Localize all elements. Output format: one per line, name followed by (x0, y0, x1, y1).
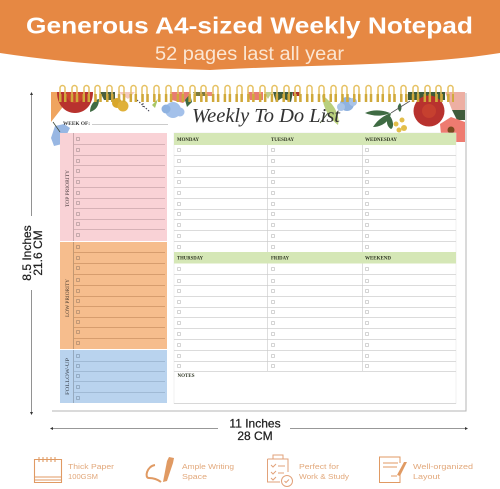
icon: pen (147, 457, 174, 482)
subtitle: 52 pages last all year (155, 44, 345, 65)
panel: low priority: LOW PRIORITY (66, 279, 71, 317)
feature: ample writing space: Space (182, 474, 207, 481)
icon: notebook (34, 457, 62, 482)
feature: well-organized layout (380, 457, 473, 482)
thursday header row (174, 252, 456, 264)
width dimension: 11 Inches (229, 416, 281, 430)
panel: follow-up (60, 350, 167, 403)
notes label: NOTES (178, 374, 195, 379)
week of label (63, 122, 168, 127)
notepad (51, 86, 466, 412)
feature: thick paper: 100GSM (68, 474, 98, 481)
feature: ample writing space: Ample Writing (182, 464, 234, 471)
feature: well-organized layout: Layout (413, 474, 440, 481)
panel: top priority: TOP PRIORITY (66, 170, 71, 207)
feature: well-organized layout: Well-organized (413, 464, 473, 471)
feature: ample writing space (147, 457, 234, 482)
feature: perfect for work and study: Work & Study (299, 474, 350, 481)
notepad title: Weekly To Do List (192, 105, 340, 127)
panel: follow-up: FOLLOW-UP (66, 358, 71, 395)
feature: perfect for work and study: Perfect for (299, 464, 340, 471)
grid checkboxes (178, 148, 368, 368)
monday header row (174, 133, 456, 145)
thursday header row: FRIDAY (271, 256, 290, 262)
title: Generous A4-sized Weekly Notepad (26, 12, 473, 38)
width dimension (50, 416, 468, 443)
monday header row: MONDAY (177, 138, 200, 143)
feature: thick paper (34, 457, 115, 482)
thursday header row: THURSDAY (177, 256, 204, 262)
monday header row: WEDNESDAY (365, 138, 398, 143)
height dimension: 8.5 Inches (20, 225, 34, 281)
monday header row: TUESDAY (271, 138, 295, 143)
spiral binding (59, 86, 454, 102)
icon: notepad and pen (380, 457, 407, 482)
panel: top priority (60, 133, 167, 241)
floral header (51, 92, 465, 146)
week of label: WEEK OF: (63, 122, 90, 127)
height dimension (20, 92, 45, 415)
banner (0, 0, 500, 70)
thursday header row: WEEKEND (365, 256, 392, 262)
width dimension: 28 CM (237, 429, 273, 443)
panel: weekly grid (174, 133, 456, 404)
icon: checklist (268, 455, 292, 486)
panel: low priority (60, 242, 167, 349)
height dimension: 21.6 CM (31, 230, 45, 276)
feature: perfect for work and study (268, 455, 350, 486)
feature: thick paper: Thick Paper (68, 464, 115, 471)
